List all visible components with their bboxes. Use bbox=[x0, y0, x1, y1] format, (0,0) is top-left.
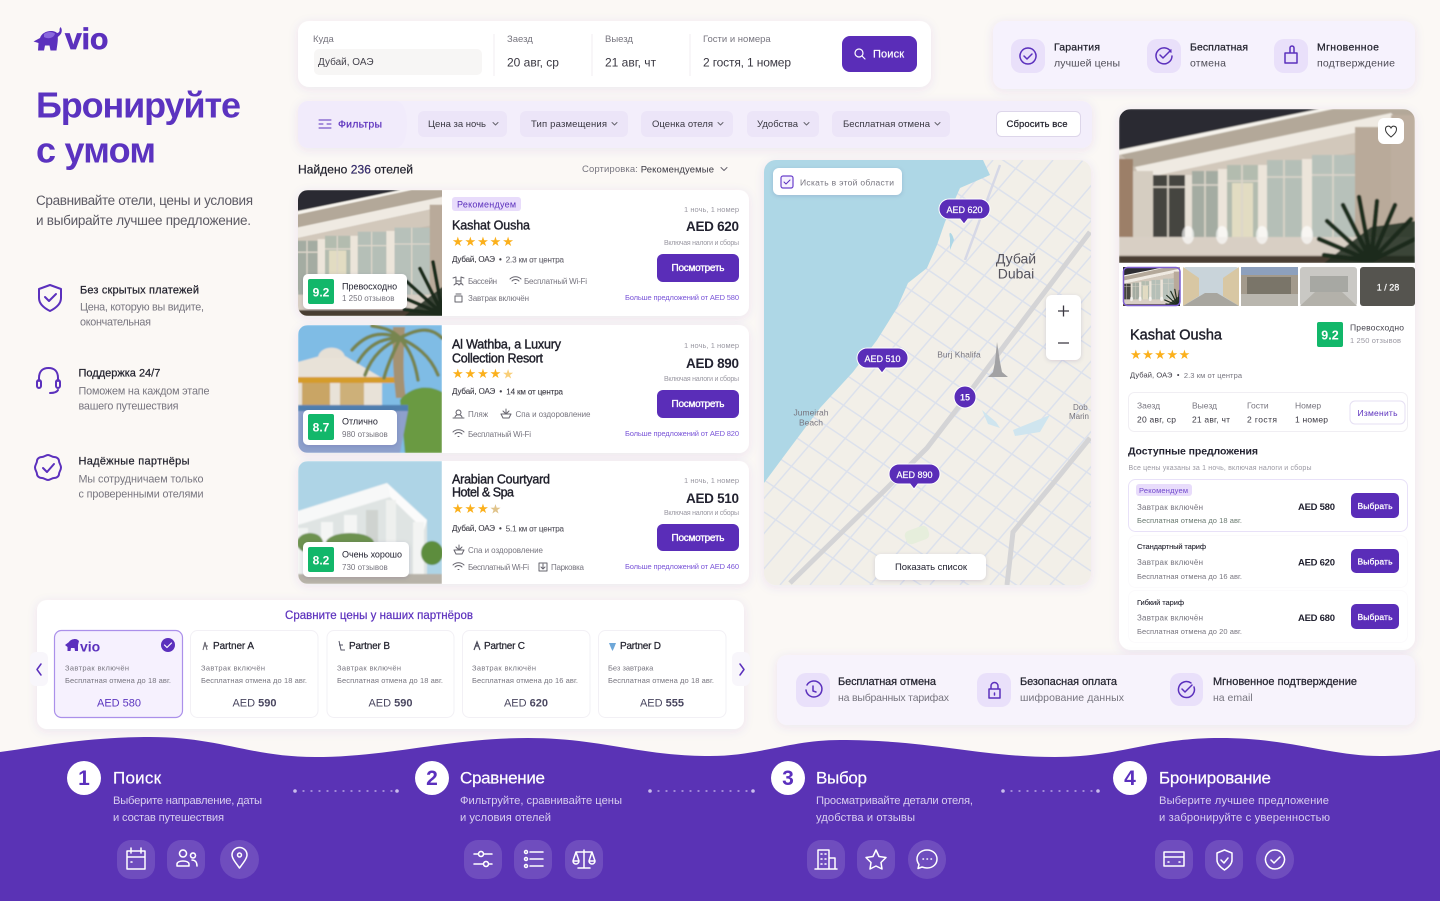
stay summary: Заезд bbox=[1137, 400, 1160, 410]
partner: C: Завтрак включён bbox=[472, 663, 536, 672]
stay summary: Номер bbox=[1295, 400, 1321, 410]
view button: Посмотреть bbox=[672, 399, 724, 410]
clipped district label bbox=[1069, 403, 1089, 421]
feature: support bbox=[37, 367, 210, 412]
thumbnails bbox=[1114, 267, 1415, 306]
amenities: Бесплатный Wi-Fi bbox=[524, 277, 587, 286]
icon: sliders bbox=[464, 840, 502, 879]
rating badge: Превосходно bbox=[342, 281, 397, 291]
icon: calendar bbox=[117, 840, 155, 879]
step 3: choose: 3 bbox=[782, 767, 794, 790]
partner: D: AED 555 bbox=[640, 697, 684, 709]
panel: search bar: Выезд bbox=[605, 34, 633, 45]
partner: A: Завтрак включён bbox=[201, 663, 265, 672]
filters button bbox=[319, 118, 382, 130]
recommended tag bbox=[452, 197, 521, 211]
step 1: search bbox=[67, 761, 262, 879]
step 4: booking: Бронирование bbox=[1159, 768, 1271, 787]
rating badge bbox=[303, 542, 409, 577]
title: с умом bbox=[36, 129, 156, 170]
benefit: secure payment: шифрование данных bbox=[1020, 692, 1125, 704]
landmark label: Burj Khalifa bbox=[937, 349, 981, 359]
step 1: search: Выберите направление, даты bbox=[113, 795, 262, 807]
price block: 1 ночь, 1 номер bbox=[684, 205, 739, 214]
price block: 1 ночь, 1 номер bbox=[684, 341, 739, 350]
partner: vio: vio bbox=[80, 638, 100, 654]
offer: flexible: Гибкий тариф bbox=[1137, 598, 1184, 607]
rating badge bbox=[303, 410, 397, 445]
view button: Посмотреть bbox=[672, 533, 724, 544]
hotel photo bbox=[298, 325, 442, 453]
offer: standard bbox=[1128, 536, 1408, 588]
feature: no hidden fees: Цена, которую вы видите, bbox=[80, 301, 204, 313]
partner: B bbox=[327, 630, 454, 718]
hotel name: Arabian Courtyard bbox=[452, 472, 550, 486]
hotel name bbox=[452, 472, 550, 499]
amenities: Спа и оздоровление bbox=[516, 410, 591, 419]
map cluster: 15 bbox=[954, 386, 976, 408]
view button bbox=[657, 524, 739, 551]
connector 3 bbox=[1001, 789, 1100, 793]
icon: Burj Khalifa tower bbox=[988, 342, 1008, 377]
offer: flexible: Завтрак включён bbox=[1137, 613, 1203, 622]
clipped district label: Dob bbox=[1073, 403, 1088, 412]
step 2: compare: Фильтруйте, сравнивайте цены bbox=[460, 795, 622, 807]
step 2: compare: 2 bbox=[426, 767, 438, 790]
price block: AED 510 bbox=[686, 491, 739, 506]
amenities: Бассейн bbox=[468, 277, 497, 286]
district label: Beach bbox=[799, 417, 823, 427]
search button bbox=[842, 36, 917, 72]
hotel name: Collection Resort bbox=[452, 351, 544, 365]
feature: partners bbox=[35, 455, 204, 500]
stay summary: 1 номер bbox=[1295, 414, 1328, 424]
sort control: Сортировка: Рекомендуемые bbox=[582, 164, 714, 175]
stay summary: Гости bbox=[1247, 400, 1269, 410]
search area checkbox bbox=[773, 168, 902, 195]
price block bbox=[664, 341, 739, 383]
partner: vio: Завтрак включён bbox=[65, 663, 129, 672]
partner: vio bbox=[54, 630, 182, 718]
step 2: compare: и условия отелей bbox=[460, 812, 551, 824]
step 4: booking: Выберите лучшее предложение bbox=[1159, 795, 1329, 807]
amenities: Парковка bbox=[551, 563, 585, 572]
partner: B: AED 590 bbox=[368, 697, 413, 709]
location: Дубай, ОАЭ • 2.3 км от центра bbox=[1130, 370, 1243, 379]
feature: support: Поддержка 24/7 bbox=[78, 367, 160, 379]
view button bbox=[657, 254, 739, 282]
hotel name bbox=[452, 337, 562, 365]
reset button: Сбросить все bbox=[1006, 119, 1068, 130]
search area checkbox: Искать в этой области bbox=[800, 177, 894, 187]
stars: ★★★★★ bbox=[452, 235, 515, 250]
step 3: choose bbox=[771, 761, 973, 879]
offer: flexible bbox=[1128, 590, 1408, 642]
offers heading bbox=[1128, 445, 1312, 472]
more offers link: Больше предложений от AED 820 bbox=[625, 429, 739, 438]
icon: building bbox=[807, 840, 845, 879]
step 1: search: Поиск bbox=[113, 768, 162, 787]
stars: ★★★★★ bbox=[1130, 348, 1191, 363]
filter chips: Оценка отеля bbox=[652, 119, 713, 130]
partner: D bbox=[598, 630, 726, 718]
change button: Изменить bbox=[1358, 408, 1398, 418]
stay summary: 21 авг, чт bbox=[1192, 414, 1230, 424]
icon: chat bbox=[908, 840, 946, 879]
rating: 1 250 отзывов bbox=[1350, 336, 1401, 345]
panel: guarantees bbox=[993, 21, 1415, 89]
feature: no hidden fees bbox=[39, 284, 204, 328]
partner: vio: Бесплатная отмена до 18 авг. bbox=[65, 676, 171, 685]
rating badge: 8.7 bbox=[313, 420, 330, 434]
stars: ★★★★★ bbox=[452, 367, 515, 382]
offers heading: Доступные предложения bbox=[1128, 445, 1258, 457]
guarantee: best price bbox=[1011, 39, 1120, 73]
rating: Превосходно bbox=[1350, 322, 1404, 332]
amenities: Бесплатный Wi-Fi bbox=[468, 563, 529, 572]
offer: standard: Выбрать bbox=[1358, 556, 1393, 566]
partner: D: Бесплатная отмена до 18 авг. bbox=[608, 676, 714, 685]
feature: partners: с проверенными отелями bbox=[78, 488, 204, 500]
filter chips: Бесплатная отмена bbox=[843, 119, 931, 130]
icon: people bbox=[167, 840, 205, 879]
step 3: choose: Просматривайте детали отеля, bbox=[816, 795, 973, 807]
rating badge: Отлично bbox=[342, 416, 378, 426]
view button: Посмотреть bbox=[672, 263, 724, 274]
map pin: AED 510 bbox=[857, 348, 908, 373]
step 3: choose: Выбор bbox=[816, 768, 867, 787]
partner: A: Partner A bbox=[213, 641, 254, 652]
band: how it works wave bbox=[0, 737, 1440, 901]
feature: support: вашего путешествия bbox=[78, 400, 179, 412]
map pin: AED 620 bbox=[939, 199, 990, 224]
stay summary: 2 гостя bbox=[1247, 414, 1277, 424]
results count: Найдено 236 отелей bbox=[298, 162, 413, 176]
zoom controls bbox=[1046, 295, 1081, 360]
panel: search bar: Дубай, ОАЭ bbox=[318, 56, 374, 68]
price block: 1 ночь, 1 номер bbox=[684, 476, 739, 485]
partners heading: Сравните цены у наших партнёров bbox=[285, 610, 473, 622]
more offers link: Больше предложений от AED 460 bbox=[625, 562, 739, 571]
connector 1 bbox=[293, 789, 399, 793]
panel: benefits bbox=[777, 655, 1415, 725]
panel: map bbox=[762, 160, 1092, 588]
rating badge: 730 отзывов bbox=[342, 563, 388, 572]
partner: C: Partner C bbox=[484, 641, 525, 652]
price block bbox=[664, 476, 739, 517]
hotel name: Kashat Ousha bbox=[452, 218, 530, 232]
map cluster: 15: 15 bbox=[960, 392, 970, 402]
offer: recommended bbox=[1128, 480, 1408, 532]
clipped district label: Marin bbox=[1069, 412, 1089, 421]
icon: scales bbox=[565, 840, 603, 879]
guarantee: free cancel: Бесплатная bbox=[1190, 41, 1248, 53]
amenities: Пляж bbox=[468, 410, 489, 419]
step 4: booking: и забронируйте с уверенностью bbox=[1159, 812, 1330, 824]
icon: location pin bbox=[220, 840, 259, 879]
stay summary: Выезд bbox=[1192, 400, 1217, 410]
rating badge: 980 отзывов bbox=[342, 430, 388, 439]
guarantee: free cancel: отмена bbox=[1190, 57, 1226, 69]
guarantee: best price: лучшей цены bbox=[1054, 57, 1120, 69]
filter chips: Цена за ночь bbox=[428, 119, 486, 130]
feature: no hidden fees: Без скрытых платежей bbox=[80, 284, 199, 296]
hotel name: Al Wathba, a Luxury bbox=[452, 337, 562, 351]
hotel card: Al Wathba bbox=[298, 325, 749, 453]
subtitle bbox=[36, 193, 253, 228]
panel: partner prices bbox=[30, 600, 750, 729]
panel: search bar: Гости и номера bbox=[703, 34, 771, 45]
panel: search bar: Куда bbox=[313, 34, 335, 45]
icon: check circle bbox=[1256, 840, 1294, 879]
hero photo bbox=[1119, 109, 1415, 263]
stars: ★★★★ bbox=[452, 502, 502, 517]
step 4: booking bbox=[1113, 761, 1330, 879]
partner: C: AED 620 bbox=[504, 697, 548, 709]
connector 2 bbox=[648, 789, 755, 793]
benefit: free cancellation: на выбранных тарифах bbox=[838, 692, 950, 704]
offers heading: Все цены указаны за 1 ночь, включая налоги и сборы bbox=[1128, 464, 1312, 472]
icon: shield check bbox=[39, 285, 61, 311]
offer: standard: AED 620 bbox=[1298, 557, 1335, 568]
partner: C: Бесплатная отмена до 16 авг. bbox=[472, 676, 578, 685]
step 1: search: 1 bbox=[78, 767, 90, 790]
feature: partners: Надёжные партнёры bbox=[78, 455, 190, 467]
wordmark: vio bbox=[65, 23, 108, 56]
offer: flexible: Бесплатная отмена до 20 авг. bbox=[1137, 627, 1242, 636]
map pin: AED 620: AED 620 bbox=[946, 205, 983, 215]
search button: Поиск bbox=[873, 48, 904, 60]
icon: card bbox=[1155, 840, 1193, 879]
price block bbox=[664, 205, 739, 247]
hotel title: Kashat Ousha bbox=[1130, 327, 1223, 343]
offer: recommended: Рекомендуем bbox=[1139, 486, 1188, 495]
amenities bbox=[453, 277, 587, 303]
offer: recommended: AED 580 bbox=[1298, 502, 1335, 513]
filter chips: Удобства bbox=[757, 119, 799, 130]
partner: B: Завтрак включён bbox=[337, 663, 401, 672]
change button bbox=[1350, 401, 1405, 424]
price block: Включая налоги и сборы bbox=[664, 509, 739, 517]
feature: partners: Мы сотрудничаем только bbox=[78, 473, 204, 485]
price block: AED 620 bbox=[686, 219, 739, 234]
step 2: compare: Сравнение bbox=[460, 768, 545, 787]
partner: B: Partner B bbox=[349, 641, 390, 652]
offer: recommended: Завтрак включён bbox=[1137, 503, 1203, 512]
amenities: Завтрак включён bbox=[468, 294, 529, 303]
benefit: secure payment: Безопасная оплата bbox=[1020, 676, 1118, 688]
hotel card: Arabian Courtyard bbox=[297, 461, 749, 584]
show list button bbox=[875, 554, 986, 580]
hotel card: Kashat Ousha bbox=[237, 190, 749, 316]
icon: star bbox=[857, 840, 895, 879]
offer: standard: Стандартный тариф bbox=[1137, 542, 1206, 551]
hotel name: Hotel & Spa bbox=[452, 485, 514, 499]
feature: no hidden fees: окончательная bbox=[80, 316, 151, 328]
map pin: AED 890 bbox=[889, 464, 940, 489]
filters button: Фильтры bbox=[338, 118, 382, 130]
step 3: choose: удобства и отзывы bbox=[816, 812, 915, 824]
hotel photo bbox=[298, 190, 442, 316]
icon: elephant bbox=[34, 27, 62, 50]
offer: recommended: Выбрать bbox=[1358, 501, 1393, 511]
icon: shield bbox=[1205, 840, 1243, 879]
rating: 9.2 bbox=[1321, 328, 1339, 342]
rating bbox=[1317, 322, 1404, 347]
panel: search bar: 20 авг, ср bbox=[507, 55, 559, 69]
guarantee: instant confirmation: Мгновенное bbox=[1317, 41, 1379, 53]
offer: flexible: Выбрать bbox=[1358, 612, 1393, 622]
arrow right bbox=[732, 652, 750, 686]
partner: A: Бесплатная отмена до 18 авг. bbox=[201, 676, 307, 685]
benefit: instant confirmation: на email bbox=[1213, 692, 1253, 704]
city label: Дубай bbox=[996, 250, 1036, 266]
offer: standard: Завтрак включён bbox=[1137, 558, 1203, 567]
offer: recommended: Бесплатная отмена до 18 авг. bbox=[1137, 516, 1242, 525]
partner: A: AED 590 bbox=[232, 697, 277, 709]
benefit: free cancellation: Бесплатная отмена bbox=[838, 676, 937, 688]
guarantee: free cancel bbox=[1147, 39, 1248, 73]
step 1: search: и состав путешествия bbox=[113, 812, 224, 824]
subtitle: и выбирайте лучшее предложение. bbox=[36, 213, 251, 228]
amenities bbox=[453, 545, 585, 572]
guarantee: instant confirmation bbox=[1274, 39, 1395, 73]
partner: vio: AED 580 bbox=[97, 697, 141, 709]
partner: B: Бесплатная отмена до 18 авг. bbox=[337, 676, 443, 685]
feature: support: Поможем на каждом этапе bbox=[78, 385, 210, 397]
icon: headset bbox=[37, 368, 60, 393]
partner: D: Partner D bbox=[620, 641, 661, 652]
panel: hotel details bbox=[1114, 109, 1415, 650]
step 2: compare bbox=[415, 761, 622, 879]
rating badge: 1 250 отзывов bbox=[342, 294, 394, 303]
guarantee: instant confirmation: подтверждение bbox=[1317, 57, 1395, 69]
partner: D: Без завтрака bbox=[608, 663, 654, 672]
stay summary: 20 авг, ср bbox=[1137, 414, 1176, 424]
panel: search bar: Заезд bbox=[507, 34, 533, 45]
rating badge: Очень хорошо bbox=[342, 549, 402, 559]
panel: filter bar bbox=[298, 101, 1092, 148]
location: Дубай, ОАЭ • 5.1 км от центра bbox=[452, 524, 565, 533]
guarantee: best price: Гарантия bbox=[1054, 41, 1100, 53]
icon: list bbox=[514, 840, 552, 879]
map pin: AED 890: AED 890 bbox=[896, 470, 933, 480]
thumbnails: 1 / 28 bbox=[1377, 282, 1399, 292]
icon: verified badge bbox=[35, 455, 61, 480]
price block: AED 890 bbox=[686, 356, 739, 371]
benefit: secure payment bbox=[977, 673, 1125, 707]
title: Бронируйте bbox=[36, 84, 241, 125]
benefit: free cancellation bbox=[796, 673, 950, 707]
partner: C bbox=[462, 630, 590, 718]
city label: Dubai bbox=[998, 265, 1034, 281]
recommended tag: Рекомендуем bbox=[457, 199, 516, 209]
price block: Включая налоги и сборы bbox=[664, 239, 739, 247]
more offers link: Больше предложений от AED 580 bbox=[625, 293, 739, 302]
map pin: AED 510: AED 510 bbox=[864, 354, 901, 364]
panel: search bar: 21 авг, чт bbox=[605, 55, 657, 69]
panel: search bar: 2 гостя, 1 номер bbox=[703, 55, 791, 69]
district label bbox=[794, 407, 829, 427]
arrow left bbox=[30, 652, 48, 686]
benefit: instant confirmation: Мгновенное подтверждение bbox=[1213, 676, 1357, 688]
reset button bbox=[996, 112, 1080, 136]
title bbox=[36, 84, 241, 170]
partner: A bbox=[190, 630, 318, 718]
view button bbox=[657, 390, 739, 418]
rating badge bbox=[303, 274, 407, 309]
subtitle: Сравнивайте отели, цены и условия bbox=[36, 193, 253, 208]
favourite button bbox=[1378, 118, 1404, 144]
step 4: booking: 4 bbox=[1124, 767, 1136, 790]
location: Дубай, ОАЭ • 14 км от центра bbox=[452, 387, 564, 396]
price block: Включая налоги и сборы bbox=[664, 375, 739, 383]
offer: standard: Бесплатная отмена до 16 авг. bbox=[1137, 572, 1242, 581]
filter chips bbox=[418, 111, 950, 137]
location: Дубай, ОАЭ • 2.3 км от центра bbox=[452, 255, 565, 264]
panel: search bar bbox=[298, 21, 931, 87]
rating badge: 8.2 bbox=[313, 553, 330, 567]
filter chips: Тип размещения bbox=[531, 119, 607, 130]
amenities: Бесплатный Wi-Fi bbox=[468, 430, 531, 439]
district label: Jumeirah bbox=[794, 407, 829, 417]
hotel photo bbox=[297, 461, 443, 584]
logo bbox=[34, 23, 108, 56]
amenities: Спа и оздоровление bbox=[468, 546, 544, 555]
benefit: instant confirmation bbox=[1170, 673, 1357, 706]
offer: flexible: AED 680 bbox=[1298, 613, 1335, 624]
rating badge: 9.2 bbox=[313, 285, 330, 299]
city label bbox=[996, 250, 1036, 281]
show list button: Показать список bbox=[895, 562, 968, 573]
stay summary bbox=[1128, 392, 1408, 432]
amenities bbox=[453, 409, 591, 439]
